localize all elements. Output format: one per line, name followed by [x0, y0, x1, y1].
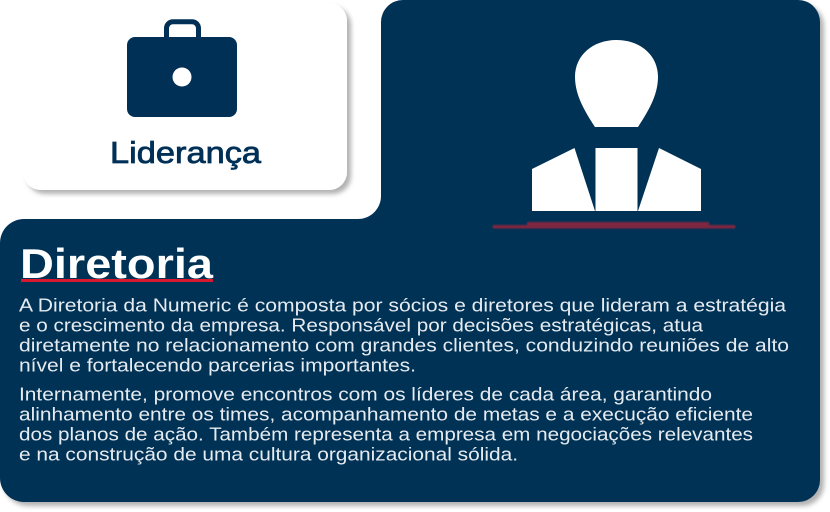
- text block: second paragraph: alinhamento entre os times, acompanhamento de metas e a execução eficiente: [19, 404, 753, 424]
- text block: first paragraph: e o crescimento da empresa. Responsável por decisões estratégicas, atua: [19, 316, 704, 336]
- text block: second paragraph: [19, 384, 753, 464]
- text block: first paragraph: [19, 296, 789, 376]
- card label: Liderança: [110, 135, 262, 170]
- text block: first paragraph: A Diretoria da Numeric é composta por sócios e diretores que lideram a estratégia: [19, 296, 787, 316]
- text block: second paragraph: e na construção de uma cultura organizacional sólida.: [19, 444, 518, 464]
- red line under person: [492, 222, 736, 228]
- icon: executive person: [532, 40, 701, 211]
- icon: briefcase: [127, 22, 237, 117]
- title underline: [21, 279, 213, 282]
- text block: first paragraph: diretamente no relacionamento com grandes clientes, conduzindo reuniões de alto: [19, 336, 789, 356]
- text block: first paragraph: nível e fortalecendo parcerias importantes.: [19, 356, 416, 376]
- title: Diretoria: [20, 240, 214, 287]
- panel: white Liderança card: [23, 3, 347, 190]
- text block: second paragraph: dos planos de ação. Também representa a empresa em negociações relevantes: [19, 424, 753, 444]
- text block: second paragraph: Internamente, promove encontros com os líderes de cada área, garantindo: [19, 384, 712, 404]
